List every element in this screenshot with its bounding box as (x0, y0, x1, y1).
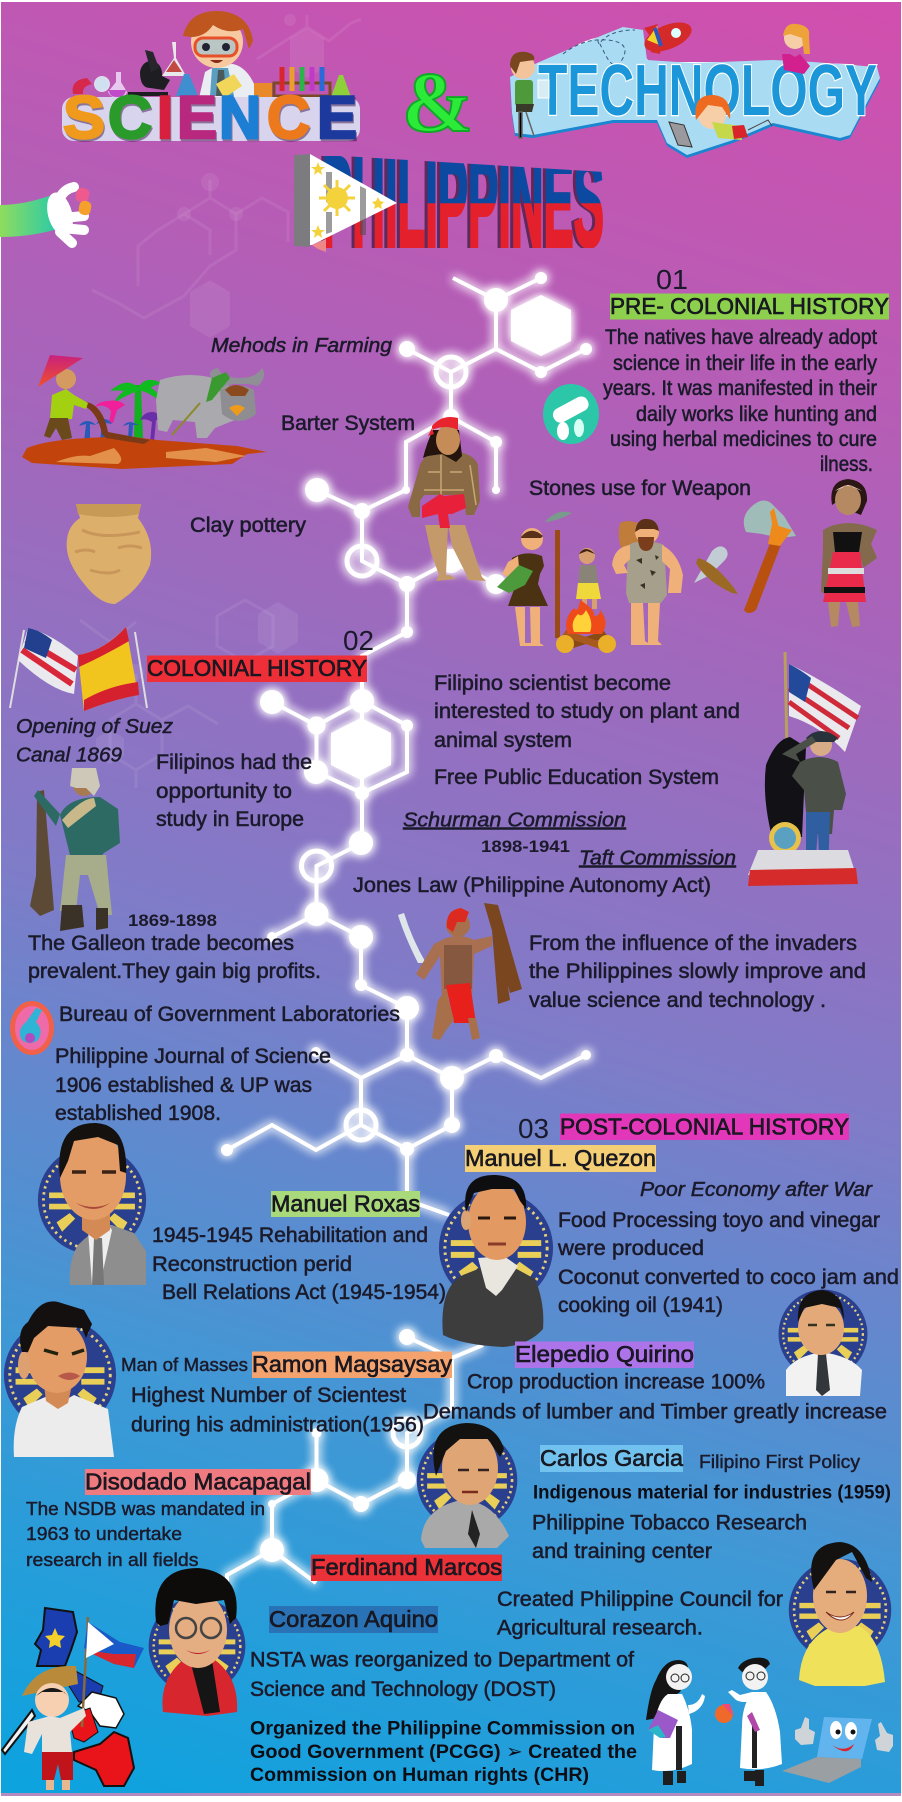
text: plant and animal study: Filipino scientist become (434, 672, 671, 695)
text: rehabilitation and reconstruction: Bell Relations Act (1945-1954) (162, 1281, 446, 1304)
portrait: Corazon Aquino (149, 1568, 245, 1716)
title art: technology (510, 17, 880, 158)
icon: cave family around fire (497, 512, 683, 653)
heading: Ramon Magsaysay: Ramon Magsaysay (252, 1351, 453, 1377)
text: rehabilitation and reconstruction: Reconstruction perid (152, 1253, 352, 1276)
section 2: colonial (10, 625, 866, 1125)
text: PCGG and CHR: Commission on Human rights (CHR) (250, 1764, 589, 1786)
section number 01: 01 (656, 264, 688, 295)
text: journal of science (55, 1045, 331, 1125)
icon: farmer with water buffalo (22, 355, 267, 469)
text: opening of Suez Canal (16, 716, 173, 766)
text: galleon trade: prevalent.They gain big profits. (28, 960, 321, 983)
icon: two scientists (646, 1658, 782, 1786)
heading: Disodado Macapagal: Disodado Macapagal (85, 1469, 311, 1495)
icon: scientist boy (162, 11, 259, 98)
heading: Corazon Aquino: Corazon Aquino (269, 1606, 438, 1632)
heading: Ferdinand Marcos: Ferdinand Marcos (311, 1554, 502, 1580)
title word: science: N (219, 84, 261, 151)
icon: clay pot (67, 504, 151, 604)
molecule timeline (221, 272, 592, 1590)
text: influence of invaders (529, 932, 866, 1012)
icon: revolutionary soldier with rifle (30, 768, 120, 931)
heading: pre-colonial history: PRE- COLONIAL HISTORY (610, 293, 889, 319)
heading: colonial history: COLONIAL HISTORY (147, 655, 367, 681)
heading: Manuel L. Quezon: Manuel L. Quezon (465, 1145, 656, 1171)
icon: tribal warrior man (408, 417, 486, 581)
section 1: pre-colonial (22, 264, 889, 653)
text: natives paragraph: ilness. (820, 453, 873, 476)
text: DOST reorganization: Science and Technology (DOST) (250, 1678, 556, 1701)
portrait: Manuel L. Quezon (439, 1175, 553, 1347)
icon: girl with laptop (669, 95, 772, 147)
title word: science (63, 84, 357, 151)
text: tobacco research: and training center (532, 1540, 712, 1563)
portrait: Carlos Garcia (417, 1423, 517, 1548)
title word: science: E (177, 84, 217, 151)
text: food processing and coconut (557, 1209, 899, 1317)
label: clay pottery: Clay pottery (190, 514, 307, 537)
icon: girl with phone (782, 24, 810, 74)
text: plant and animal study: interested to study on plant and (434, 700, 740, 723)
date: 1898-1941: 1898-1941 (481, 837, 570, 856)
text: Schurman Commission: Schurman Commission (403, 810, 626, 832)
text: influence of invaders: From the influence of the invaders (529, 932, 857, 955)
title word: science: E (317, 84, 357, 151)
title word: science: C (108, 84, 152, 151)
portrait: Elpidio Quirino (779, 1290, 867, 1396)
label: stones for weapon: Stones use for Weapon (529, 477, 751, 500)
section number 03: 03 (518, 1113, 549, 1144)
text: indigenous material: Indigenous material for industries (1959) (533, 1482, 891, 1504)
text: free public education: Free Public Education System (434, 766, 719, 789)
text: galleon trade: The Galleon trade becomes (28, 932, 294, 955)
text: opening of Suez Canal: Opening of Suez (16, 716, 173, 738)
text: DOST reorganization (250, 1648, 634, 1701)
text: Filipino First Policy: Filipino First Policy (699, 1452, 860, 1472)
icon: tribal woman (821, 479, 877, 627)
date: 1869-1898: 1869-1898 (128, 911, 217, 930)
label: methods in farming: Mehods in Farming (211, 335, 392, 357)
text: study in Europe: opportunity to (156, 780, 292, 803)
section 3: post-colonial (2, 1113, 899, 1790)
title word: science: S (63, 84, 105, 151)
text: PCGG and CHR: Organized the Philippine Commission on (250, 1718, 635, 1740)
text: plant and animal study (434, 672, 740, 752)
heading: post-colonial history: POST-COLONIAL HISTORY (560, 1114, 849, 1140)
text: bureau of government laboratories: Bureau of Government Laboratories (59, 1003, 400, 1026)
ampersand: & (402, 54, 473, 150)
text: NSDB mandate (26, 1499, 265, 1570)
text: NSDB mandate: 1963 to undertake (26, 1524, 182, 1544)
text: natives paragraph: using herbal medicines to cure (610, 428, 877, 451)
text: highest number of scientists: Highest Number of Scientest (131, 1384, 406, 1407)
icon: lab equipment (73, 50, 351, 98)
text: DOST reorganization: NSTA was reorganized to Department of (250, 1648, 634, 1672)
icon: rocket (640, 17, 696, 57)
text: study in Europe (156, 751, 312, 831)
text: crop production and lumber: Crop production increase 100% (467, 1370, 765, 1394)
icon: US and Spain flags (10, 627, 147, 711)
text: influence of invaders: value science and technology . (529, 989, 826, 1012)
text: agricultural research council: Created Philippine Council for (497, 1588, 783, 1611)
text: agricultural research council: Agricultural research. (497, 1617, 703, 1640)
text: natives paragraph: years. It was manifested in their (603, 377, 877, 400)
text: crop production and lumber: Demands of lumber and Timber greatly increase (423, 1400, 887, 1424)
text: food processing and coconut: Food Processing toyo and vinegar (558, 1209, 880, 1232)
title word backing (62, 97, 360, 141)
icon: Philippines map with boy (2, 1608, 144, 1790)
text: galleon trade (28, 932, 321, 983)
title word: science: I (157, 84, 173, 151)
text: highest number of scientists (131, 1384, 424, 1436)
portrait: Ferdinand Marcos (789, 1542, 891, 1686)
text: natives paragraph: The natives have already adopt (605, 326, 877, 349)
text: journal of science: 1906 established & UP was (55, 1074, 312, 1097)
text: study in Europe: Filipinos had the (156, 751, 312, 774)
label: barter system: Barter System (281, 412, 415, 435)
text: man of masses: Man of Masses (121, 1355, 248, 1375)
text: natives paragraph (603, 326, 877, 476)
text: study in Europe: study in Europe (156, 808, 304, 831)
text: natives paragraph: daily works like hunting and (636, 403, 877, 426)
icon: medicine capsule badge (543, 384, 599, 444)
section number 02: 02 (343, 625, 374, 656)
icon: flask badge (10, 1001, 54, 1055)
title art: science (62, 11, 360, 151)
heading: Carlos Garcia: Carlos Garcia (540, 1445, 683, 1471)
icon: hand holding colour (0, 187, 92, 243)
title art: philippines flag lettering (294, 154, 603, 252)
text: PCGG and CHR (250, 1718, 637, 1786)
heading: Elepedio Quirino: Elepedio Quirino (515, 1341, 694, 1367)
portrait: Ramon Magsaysay (4, 1301, 128, 1457)
text: plant and animal study: animal system (434, 729, 572, 752)
text: food processing and coconut: Coconut converted to coco jam and (558, 1266, 899, 1289)
text: highest number of scientists: during his administration(1956) (131, 1414, 424, 1436)
text: food processing and coconut: cooking oil (1941) (558, 1294, 723, 1317)
text: rehabilitation and reconstruction: 1945-1945 Rehabilitation and (152, 1224, 428, 1247)
text: agricultural research council (497, 1588, 783, 1640)
icon: happy laptop (782, 1717, 893, 1783)
heading: Manuel Roxas: Manuel Roxas (271, 1190, 420, 1216)
text: crop production and lumber (423, 1370, 887, 1424)
title word: science: C (267, 84, 310, 151)
text: natives paragraph: science in their life in the early (613, 352, 877, 375)
text: Taft Commission: Taft Commission (579, 848, 736, 870)
text: journal of science: Philippine Journal of Science (55, 1045, 331, 1068)
text: poor economy after war: Poor Economy after War (640, 1179, 873, 1201)
text: NSDB mandate: The NSDB was mandated in (26, 1499, 265, 1519)
portrait: Manuel Roxas (38, 1123, 146, 1285)
text: NSDB mandate: research in all fields (26, 1550, 198, 1570)
text: tobacco research (532, 1512, 807, 1563)
text: PCGG and CHR: Good Government (PCGG) ➢ Created the (250, 1741, 637, 1763)
icon: kid with tablet (510, 52, 549, 138)
text: influence of invaders: the Philippines slowly improve and (529, 960, 866, 983)
icon: warrior with sword and shield (398, 903, 522, 1040)
text: journal of science: established 1908. (55, 1102, 221, 1125)
text: Jones Law: Jones Law (Philippine Autonomy Act) (353, 874, 711, 897)
icon: saluting general with flag (748, 652, 861, 886)
text: food processing and coconut: were produced (557, 1237, 704, 1260)
icon: stone weapons (694, 500, 796, 613)
text: rehabilitation and reconstruction (152, 1224, 446, 1304)
text: opening of Suez Canal: Canal 1869 (16, 744, 122, 766)
text: tobacco research: Philippine Tobacco Research (532, 1512, 807, 1535)
